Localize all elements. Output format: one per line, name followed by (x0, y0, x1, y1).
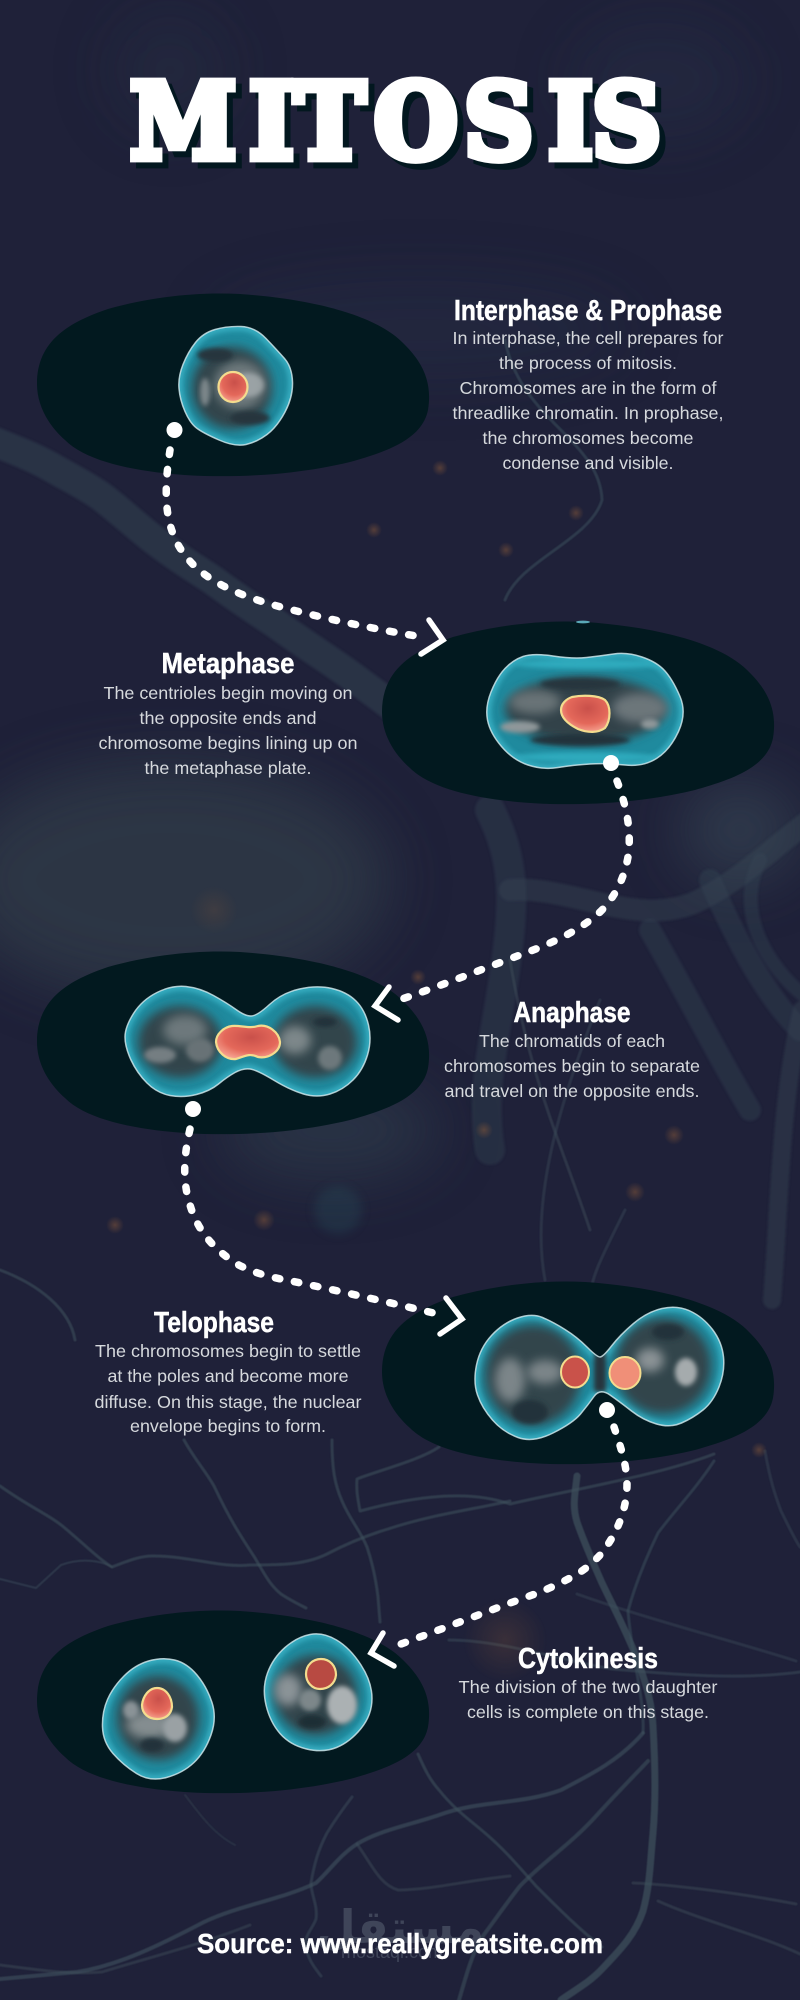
blob 2 (382, 622, 774, 804)
description: and travel on the opposite ends. (444, 1081, 700, 1101)
nucleus (216, 1026, 280, 1059)
arrow: telophase to cytokinesis (371, 1402, 627, 1666)
panel: cytokinesis (37, 1611, 718, 1793)
description: cells is complete on this stage. (467, 1702, 709, 1722)
description (98, 683, 358, 778)
description: The division of the two daughter (458, 1677, 718, 1697)
description: In interphase, the cell prepares for (452, 328, 724, 348)
cell 2 (487, 653, 683, 768)
nucleus (142, 1688, 172, 1719)
description: the metaphase plate. (144, 758, 312, 778)
nucleus right (610, 1357, 640, 1389)
heading: Metaphase (162, 648, 294, 680)
source: Source: www.reallygreatsite.com (197, 1928, 603, 1959)
title: MITOSIS (130, 60, 661, 183)
blob 1 (37, 294, 429, 476)
description (94, 1341, 362, 1436)
watermark: mostaql.com (341, 1942, 443, 1962)
cell 3 (125, 986, 370, 1097)
nucleus (561, 696, 610, 732)
description: the opposite ends and (140, 708, 316, 728)
panel: metaphase (98, 621, 774, 804)
arrow: interphase to metaphase (166, 422, 443, 654)
cell 1 (179, 326, 293, 445)
heading: Telophase (154, 1307, 274, 1339)
description: The centrioles begin moving on (104, 683, 352, 703)
description (452, 328, 724, 473)
daughter cell left (102, 1659, 214, 1779)
description: at the poles and become more (108, 1366, 348, 1386)
cell fragment (576, 621, 590, 623)
heading: Anaphase (514, 997, 630, 1029)
description: the process of mitosis. (499, 353, 677, 373)
blob 3 (37, 952, 429, 1134)
heading: Cytokinesis (518, 1643, 658, 1675)
panel: interphase and prophase (37, 294, 724, 476)
panel: telophase (94, 1282, 774, 1464)
description (458, 1677, 718, 1722)
arrow: metaphase to anaphase (375, 755, 629, 1020)
watermark: مستقل (316, 1900, 484, 1954)
description: condense and visible. (502, 453, 674, 473)
description: the chromosomes become (482, 428, 694, 448)
blob 4 (382, 1282, 774, 1464)
nucleus (306, 1659, 336, 1689)
description (444, 1031, 700, 1101)
description: threadlike chromatin. In prophase, (452, 403, 724, 423)
heading: Interphase & Prophase (454, 295, 722, 327)
arrow: anaphase to telophase (185, 1101, 462, 1334)
nucleus (218, 372, 248, 402)
panel: anaphase (37, 952, 700, 1134)
description: The chromosomes begin to settle (95, 1341, 361, 1361)
description: chromosome begins lining up on (98, 733, 358, 753)
description: chromosomes begin to separate (444, 1056, 700, 1076)
cell 4 (475, 1307, 724, 1439)
description: envelope begins to form. (130, 1416, 326, 1436)
nucleus left (561, 1356, 589, 1388)
description: diffuse. On this stage, the nuclear (94, 1392, 362, 1412)
description: The chromatids of each (479, 1031, 665, 1051)
description: Chromosomes are in the form of (460, 378, 717, 398)
daughter cell right (264, 1634, 372, 1751)
blob 5 (37, 1611, 429, 1793)
